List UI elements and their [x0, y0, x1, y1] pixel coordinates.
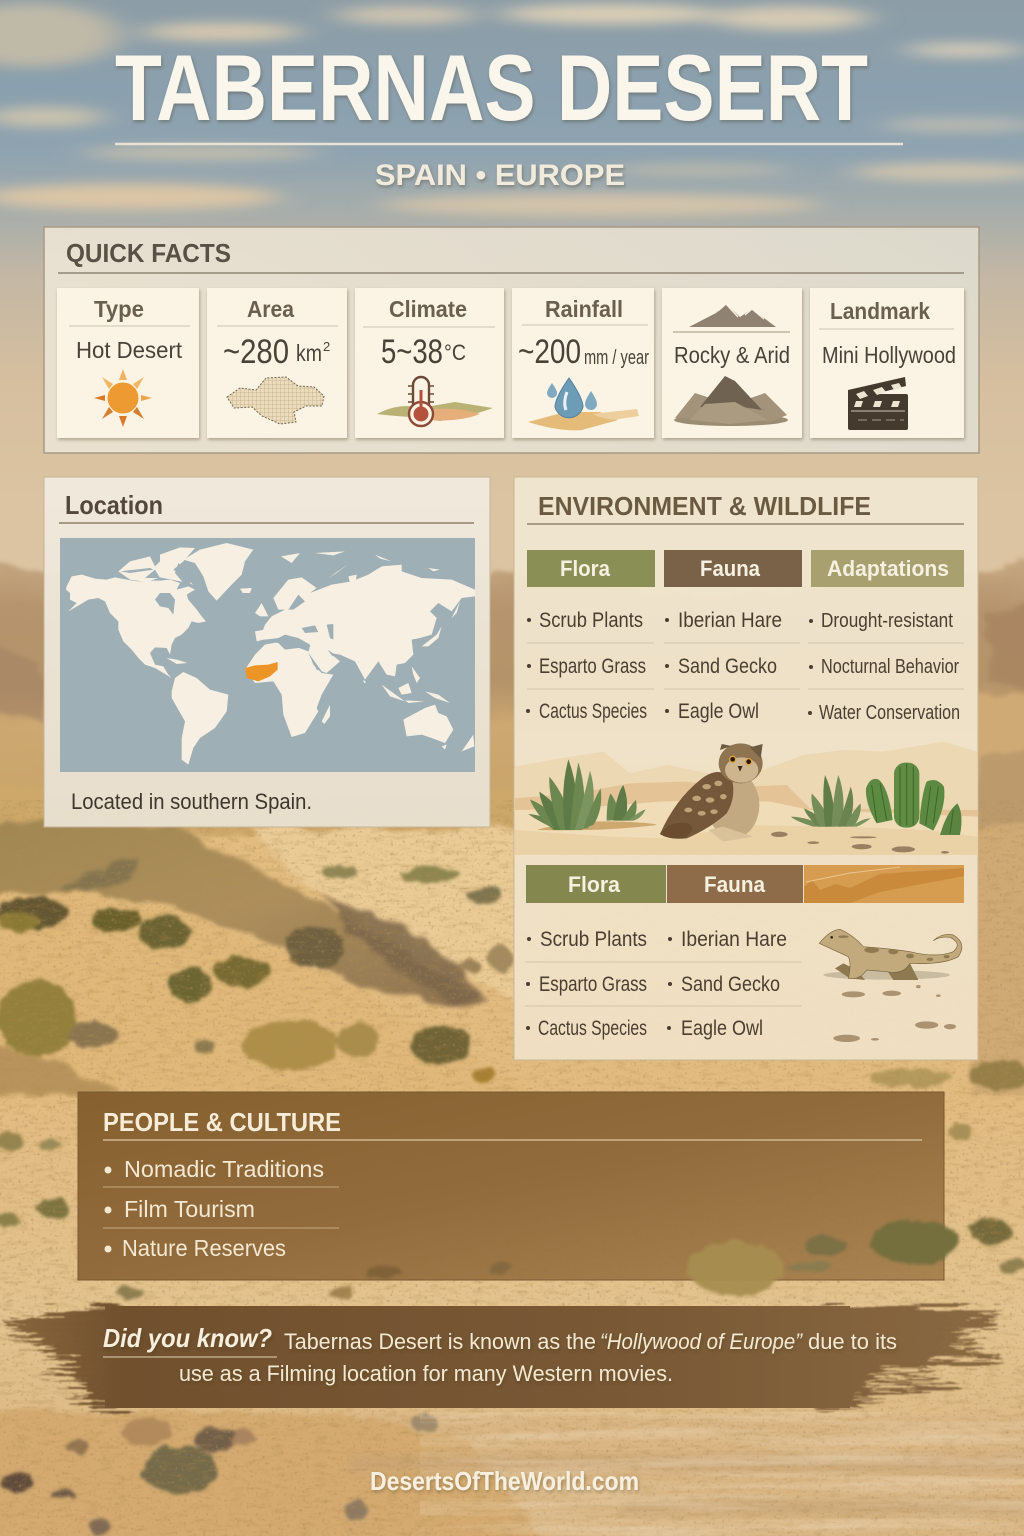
- table headers: bottom: Fauna: [704, 872, 766, 897]
- card: rainfall: ~200: [518, 333, 581, 371]
- icon: water drop: [528, 378, 639, 430]
- heading: location: Location: [65, 490, 163, 520]
- list: fauna bottom: Sand Gecko: [681, 973, 780, 996]
- card: rainfall: mm / year: [584, 347, 649, 369]
- card: area: ~280: [223, 333, 289, 371]
- panel: environment and wildlife: [514, 477, 978, 1060]
- list: adaptations: Nocturnal Behavior: [821, 656, 959, 678]
- card: area: [207, 288, 347, 438]
- icon: thermometer: [377, 377, 493, 426]
- world map: [60, 538, 475, 772]
- table headers: top: [527, 550, 964, 587]
- callout: did you know: “Hollywood of Europe”: [600, 1329, 804, 1354]
- icon: agave plant right: [791, 775, 871, 827]
- icon: gecko: [819, 929, 962, 1042]
- heading: environment and wildlife: ENVIRONMENT & WILDLIFE: [538, 491, 871, 521]
- table headers: bottom: Flora: [568, 872, 621, 897]
- card: climate: 5~38: [381, 333, 443, 371]
- bushes seen through panel: [367, 1220, 959, 1295]
- table headers: bottom: [526, 865, 964, 903]
- list: adaptations: Drought-resistant: [821, 610, 953, 632]
- icon: owl: [660, 743, 763, 842]
- list: fauna bottom: [665, 928, 802, 1040]
- list: fauna bottom: Iberian Hare: [681, 928, 787, 951]
- list: fauna top: Iberian Hare: [678, 609, 782, 632]
- icon: area map: [227, 377, 324, 424]
- list: flora top: Esparto Grass: [539, 655, 646, 678]
- card: terrain: Rocky & Arid: [674, 342, 790, 368]
- list: fauna top: [664, 609, 800, 723]
- list: flora top: Scrub Plants: [539, 609, 643, 632]
- subtitle: SPAIN • EUROPE: [375, 159, 625, 192]
- callout: did you know: Did you know?: [103, 1323, 272, 1353]
- table headers: top: Fauna: [700, 556, 761, 581]
- caption: location: Located in southern Spain.: [71, 789, 312, 814]
- list: culture: [103, 1156, 339, 1261]
- card: climate: Climate: [389, 296, 467, 322]
- card: landmark: Landmark: [830, 298, 930, 324]
- card: type: [57, 288, 199, 438]
- list: fauna top: Sand Gecko: [678, 655, 777, 678]
- heading: quick facts: QUICK FACTS: [66, 238, 231, 268]
- list: flora bottom: Cactus Species: [538, 1017, 647, 1040]
- list: flora bottom: Esparto Grass: [539, 973, 647, 996]
- card: type: Type: [94, 296, 144, 322]
- list: culture: Film Tourism: [124, 1196, 255, 1222]
- panel: location: [44, 477, 490, 827]
- icon: mountain range: [689, 304, 776, 327]
- table headers: top: Adaptations: [827, 556, 949, 581]
- icon: cactus: [866, 763, 961, 835]
- list: flora bottom: [525, 928, 666, 1040]
- panel: people and culture: [78, 1092, 959, 1295]
- list: adaptations: [808, 610, 964, 724]
- heading: people and culture: PEOPLE & CULTURE: [103, 1107, 341, 1137]
- icon: clapperboard: [848, 377, 908, 430]
- table headers: top: Flora: [560, 556, 611, 581]
- callout: did you know: Tabernas Desert is known as the: [284, 1329, 596, 1354]
- card: landmark: [810, 288, 964, 438]
- icon: rocky mountain: [674, 376, 788, 426]
- callout: did you know: due to its: [808, 1329, 897, 1354]
- card: terrain: [662, 288, 802, 438]
- icon: sun: [94, 369, 152, 427]
- card: rainfall: [512, 288, 654, 438]
- card: climate: °C: [444, 340, 466, 365]
- highlighted region: [245, 662, 278, 681]
- title: TABERNAS DESERT: [115, 35, 868, 140]
- card: area: Area: [247, 296, 294, 322]
- card: climate: [355, 288, 504, 438]
- footer: website: DesertsOfTheWorld.com: [370, 1466, 639, 1496]
- list: culture: Nomadic Traditions: [124, 1156, 324, 1182]
- list: flora bottom: Scrub Plants: [540, 928, 647, 951]
- illustration: desert scene: [515, 728, 978, 855]
- callout: did you know: [5, 1306, 1000, 1408]
- card: landmark: Mini Hollywood: [822, 342, 956, 368]
- list: adaptations: Water Conservation: [819, 702, 960, 724]
- card: type: Hot Desert: [76, 337, 183, 363]
- list: culture: Nature Reserves: [122, 1235, 286, 1261]
- icon: agave plant left: [528, 759, 646, 830]
- card: rainfall: Rainfall: [545, 296, 623, 322]
- list: fauna top: Eagle Owl: [678, 700, 759, 723]
- panel: quick facts: [44, 227, 979, 453]
- list: fauna bottom: Eagle Owl: [681, 1017, 763, 1040]
- card: area: 2: [323, 339, 330, 354]
- list: flora top: Cactus Species: [539, 700, 647, 723]
- callout: did you know: use as a Filming location for many Western movies.: [179, 1361, 673, 1386]
- list: flora top: [526, 609, 654, 723]
- card: area: km: [296, 340, 322, 366]
